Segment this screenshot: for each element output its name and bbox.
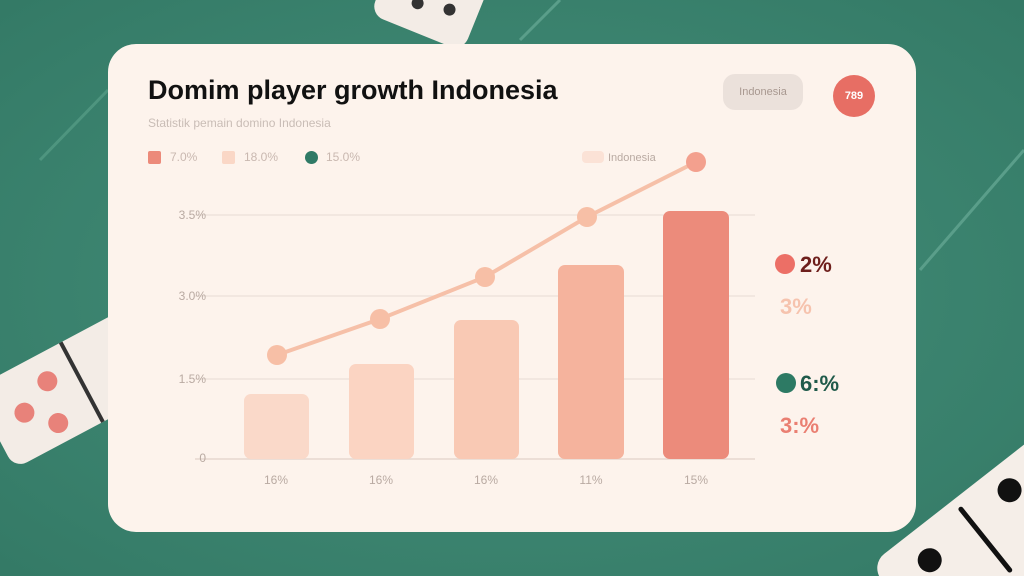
badge — [833, 75, 875, 117]
chart: 11% — [579, 473, 603, 487]
legend: 18.0% — [244, 150, 278, 164]
chart: 3% — [780, 294, 812, 319]
subtitle: Statistik pemain domino Indonesia — [148, 116, 331, 130]
card panel — [108, 44, 916, 532]
chart: 6:% — [800, 371, 839, 396]
chart: Indonesia — [608, 152, 657, 164]
chart: 2% — [800, 252, 832, 277]
legend: 7.0% — [170, 150, 197, 164]
domino top — [374, 0, 484, 44]
chart: 3.0% — [179, 289, 206, 303]
legend: 15.0% — [326, 150, 360, 164]
chart: 3:% — [780, 413, 819, 438]
pill: Indonesia — [723, 74, 803, 110]
pill: Indonesia: Indonesia — [739, 86, 787, 98]
chart: 16% — [264, 473, 288, 487]
chart: 16% — [474, 473, 498, 487]
domino bottom right — [877, 444, 1024, 576]
legend — [148, 150, 360, 164]
chart: 16% — [369, 473, 393, 487]
chart: 15% — [684, 473, 708, 487]
chart: 0 — [199, 451, 206, 465]
chart: 1.5% — [179, 372, 206, 386]
badge: 789 — [845, 90, 863, 102]
chart: 3.5% — [179, 208, 206, 222]
domino left — [0, 317, 108, 464]
title: Domim player growth Indonesia — [148, 75, 558, 105]
